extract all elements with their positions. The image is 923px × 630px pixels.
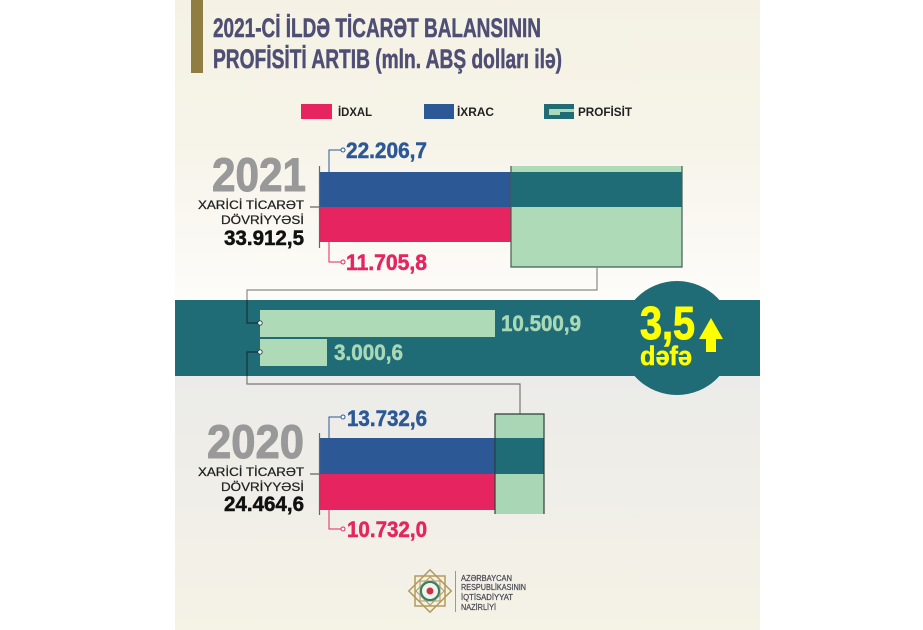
- callout: 3,5 times badge: [620, 281, 734, 395]
- 2020 turnover label: 24.464,6: [224, 493, 304, 516]
- connector: band to 2020 profit: [247, 376, 520, 414]
- 2020 export value: [329, 406, 427, 438]
- 2021 export value: 22.206,7: [346, 138, 427, 163]
- ministry name: İQTİSADİYYAT: [461, 592, 513, 602]
- 2020 export value: 13.732,6: [347, 406, 427, 431]
- 2021 turnover label: [198, 148, 306, 250]
- title: PROFİSİTİ ARTIB (mln. ABŞ dolları ilə): [213, 44, 562, 74]
- ministry name: NAZİRLİYİ: [461, 602, 496, 612]
- 2020 bar chart: [310, 414, 544, 515]
- ministry name: AZƏRBAYCAN: [461, 574, 512, 583]
- icon: ministry emblem: [409, 570, 451, 612]
- panel: bottom background: [175, 376, 760, 630]
- 2021 turnover label: DÖVRİYYƏSİ: [221, 213, 304, 227]
- surplus bars: 3.000,6: [334, 340, 403, 365]
- 2021 import value: [329, 242, 427, 275]
- 2020 turnover label: XARİCİ TİCARƏT: [198, 465, 305, 479]
- title: 2021-Cİ İLDƏ TİCARƏT BALANSININ: [213, 13, 541, 43]
- divider: [455, 571, 456, 612]
- 2020 import value: [329, 510, 427, 542]
- 2021 turnover label: 33.912,5: [224, 227, 304, 250]
- 2020 turnover label: 2020: [207, 415, 304, 468]
- callout: 3,5 times badge: dəfə: [640, 341, 692, 371]
- ministry name: [461, 574, 526, 612]
- 2020 turnover label: DÖVRİYYƏSİ: [221, 480, 304, 494]
- title: [213, 13, 562, 74]
- surplus bars: 10.500,9: [501, 311, 581, 336]
- 2021 import value: 11.705,8: [346, 250, 427, 275]
- legend: İDXAL: [338, 106, 372, 119]
- 2021 turnover label: XARİCİ TİCARƏT: [198, 198, 305, 212]
- legend: [301, 104, 632, 119]
- panel: top background: [175, 0, 760, 300]
- legend: PROFİSİT: [578, 106, 632, 119]
- title accent bar: [191, 0, 203, 73]
- 2020 turnover label: [198, 415, 305, 516]
- panel: surplus band: [175, 300, 760, 376]
- 2021 turnover label: 2021: [212, 148, 306, 201]
- 2021 export value: [329, 138, 427, 172]
- icon: up arrow: [699, 318, 723, 352]
- 2020 import value: 10.732,0: [347, 517, 427, 542]
- legend: İXRAC: [457, 106, 494, 119]
- ministry name: RESPUBLİKASININ: [461, 582, 526, 592]
- callout: 3,5 times badge: 3,5: [640, 297, 695, 349]
- 2021 bar chart: [310, 166, 682, 267]
- connector: 2021 profit to band: [247, 267, 597, 300]
- surplus bars: [247, 300, 581, 376]
